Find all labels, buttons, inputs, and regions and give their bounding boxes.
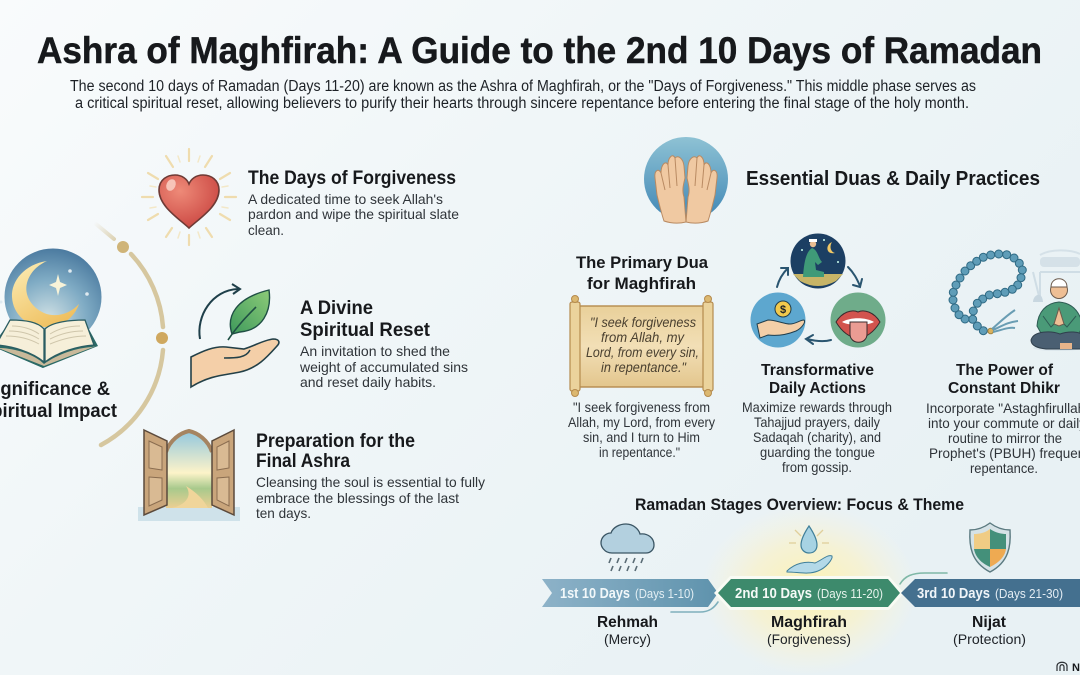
text block: dua translation: "I seek forgiveness from <box>573 400 710 415</box>
text block: transformative daily actions: guarding the tongue <box>760 445 875 460</box>
text block: transformative daily actions: Tahajjud prayers, daily <box>754 415 880 430</box>
icon: crescent moon and open book <box>0 248 102 368</box>
ribbon connectors <box>671 573 947 612</box>
label: nijat: Nijat <box>972 614 1007 631</box>
icon: daily actions cycle <box>750 234 886 348</box>
text block: dua translation: in repentance." <box>599 445 680 460</box>
text block: divine spiritual reset: weight of accumulated sins <box>299 360 468 375</box>
stages timeline <box>542 505 1080 675</box>
heading: primary dua: for Maghfirah <box>587 274 696 293</box>
icon: seated person with mosque <box>1031 250 1080 351</box>
intro text <box>70 78 976 112</box>
icon: parchment scroll with quote: "I seek forgiveness <box>590 315 696 330</box>
text block: transformative daily actions: Transformative <box>761 362 874 379</box>
text block: divine spiritual reset: Spiritual Reset <box>300 320 431 341</box>
heading: ramadan stages overview: Ramadan Stages Overview: Focus & Theme <box>635 495 964 514</box>
text block: preparation for the final ashra <box>256 431 485 521</box>
text block: the days of forgiveness: pardon and wipe the spiritual slate <box>248 207 459 222</box>
icon: rain cloud <box>601 524 654 571</box>
text block: transformative daily actions: from gossip. <box>782 460 852 475</box>
heading: significance and spiritual impact <box>0 379 118 422</box>
text block: the days of forgiveness <box>248 168 459 238</box>
text block: the days of forgiveness: A dedicated time to seek Allah's <box>248 192 443 207</box>
label: nijat <box>953 614 1026 647</box>
text block: preparation for the final ashra: Cleansing the soul is essential to fully <box>256 475 485 490</box>
text block: preparation for the final ashra: Preparation for the <box>256 431 415 452</box>
icon: praying hands <box>644 137 728 223</box>
label: rehmah: (Mercy) <box>604 631 651 647</box>
text block: dua translation <box>568 400 715 460</box>
icon: night prayer <box>790 234 846 288</box>
ribbon: second ten days: 2nd 10 Days <box>735 585 812 602</box>
ribbon: third ten days: 3rd 10 Days <box>917 585 990 602</box>
icon: charity hand: $ <box>780 304 786 316</box>
label: rehmah: Rehmah <box>597 614 658 631</box>
label: nijat: (Protection) <box>953 631 1026 647</box>
text block: power of constant dhikr: The Power of <box>956 362 1054 379</box>
intro text: a critical spiritual reset, allowing believers to purify their hearts through sincere repentance before entering the final stage of the holy month. <box>75 95 969 112</box>
text block: the days of forgiveness: The Days of Forgiveness <box>248 168 456 189</box>
ribbon: first ten days <box>542 579 718 607</box>
arc connector <box>96 224 168 445</box>
ribbon: second ten days <box>714 576 904 610</box>
label: maghfirah: Maghfirah <box>771 614 847 631</box>
icon: glowing heart <box>142 149 236 245</box>
ribbon: second ten days: (Days 11-20) <box>817 587 883 601</box>
ribbon: first ten days: 1st 10 Days <box>560 585 630 602</box>
heading: essential duas and daily practices: Essential Duas & Daily Practices <box>746 167 1040 190</box>
text block: power of constant dhikr: repentance. <box>970 461 1038 476</box>
text block: power of constant dhikr <box>926 362 1080 476</box>
title: Ashra of Maghfirah: A Guide to the 2nd 10 Days of Ramadan <box>37 30 1042 71</box>
text block: transformative daily actions <box>742 362 892 475</box>
text block: transformative daily actions: Daily Actions <box>769 380 866 397</box>
text block: divine spiritual reset: and reset daily habits. <box>300 375 436 390</box>
icon: open door to path <box>138 430 240 521</box>
text block: divine spiritual reset <box>299 298 468 390</box>
cycle arrows <box>777 267 862 344</box>
text block: power of constant dhikr: routine to mirror the <box>948 431 1062 446</box>
text block: dua translation: Allah, my Lord, from every <box>568 415 715 430</box>
highlight glow <box>701 505 917 675</box>
icon: parchment scroll with quote <box>570 296 713 396</box>
text block: transformative daily actions: Sadaqah (charity), and <box>753 430 881 445</box>
text block: dua translation: sin, and I turn to Him <box>583 430 700 445</box>
text block: transformative daily actions: Maximize rewards through <box>742 400 892 415</box>
ribbon: third ten days: (Days 21-30) <box>995 587 1063 601</box>
label: maghfirah: (Forgiveness) <box>767 631 851 647</box>
text block: divine spiritual reset: An invitation to shed the <box>300 344 450 359</box>
icon: shield <box>970 523 1010 572</box>
heading: primary dua: The Primary Dua <box>576 253 709 272</box>
icon: parchment scroll with quote: in repentance." <box>601 360 687 375</box>
text block: preparation for the final ashra: ten days. <box>256 506 311 521</box>
icon: prayer beads <box>949 250 1026 335</box>
text block: power of constant dhikr: Constant Dhikr <box>948 380 1060 397</box>
text block: the days of forgiveness: clean. <box>248 223 284 238</box>
icon: hand with leaf and arrow <box>191 284 279 387</box>
ribbon: third ten days <box>901 579 1080 607</box>
icon: parchment scroll with quote: Lord, from every sin, <box>586 345 699 360</box>
icon: tongue and lips <box>830 292 886 348</box>
ribbon: first ten days: (Days 1-10) <box>635 587 694 601</box>
icon: water drop over hand <box>787 526 832 573</box>
label: rehmah <box>597 614 658 647</box>
intro text: The second 10 days of Ramadan (Days 11-20) are known as the Ashra of Maghfirah, or the "Days of Forgiveness." This middle phase serves as <box>70 78 976 95</box>
heading: primary dua <box>576 253 709 293</box>
text block: divine spiritual reset: A Divine <box>300 298 373 319</box>
watermark <box>1057 662 1080 674</box>
label: maghfirah <box>767 614 851 647</box>
icon: parchment scroll with quote: from Allah, my <box>601 330 685 345</box>
text block: preparation for the final ashra: embrace the blessings of the last <box>256 491 459 506</box>
text block: preparation for the final ashra: Final Ashra <box>256 451 350 472</box>
watermark: N <box>1072 662 1080 674</box>
